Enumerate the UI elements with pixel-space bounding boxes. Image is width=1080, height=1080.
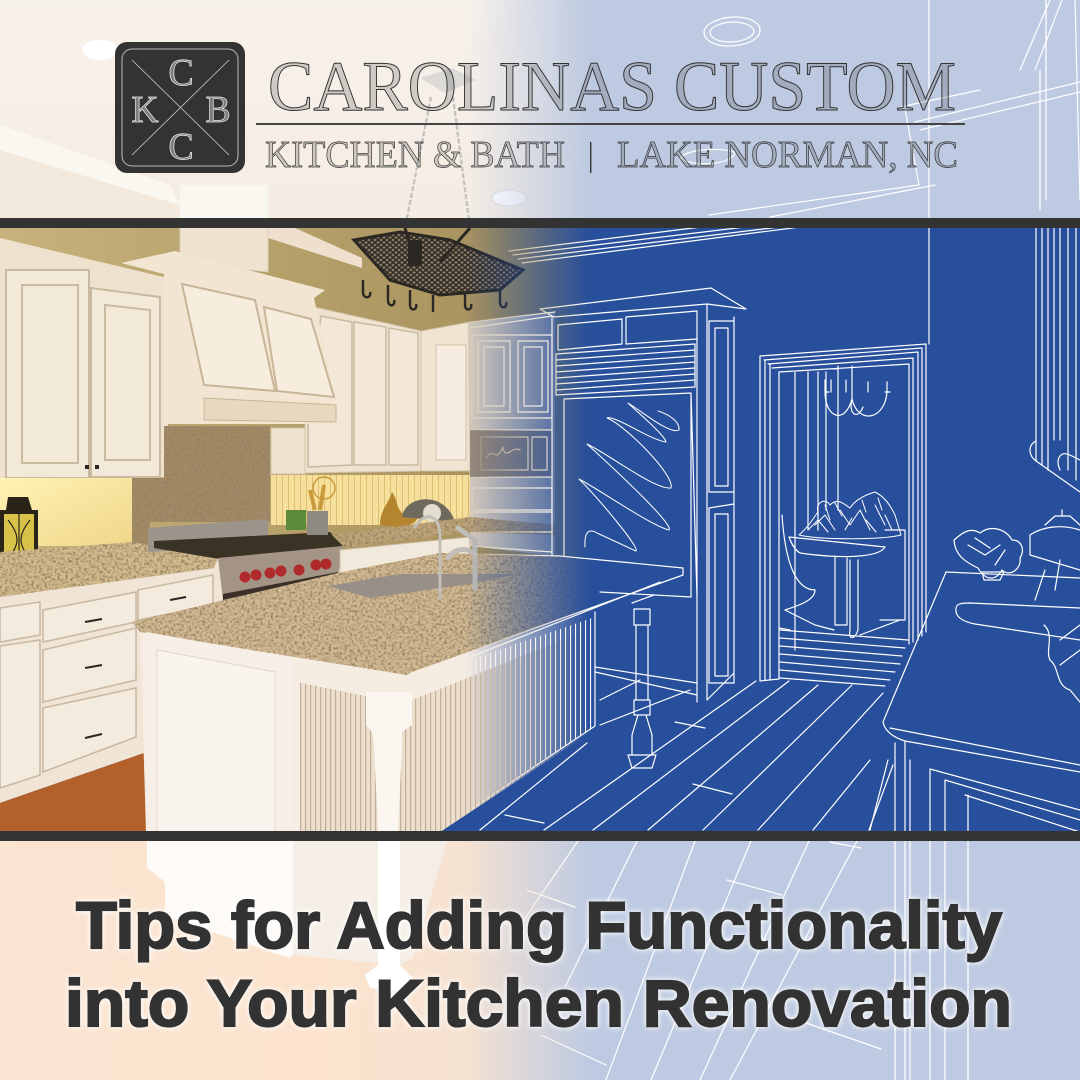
photo: upper wall below crown	[0, 150, 95, 180]
burner grates	[154, 532, 343, 560]
blueprint drawing: white line art of kitchen	[412, 0, 1080, 1080]
photo: rear right counter	[332, 517, 555, 548]
blueprint: tall fridge cabinet	[540, 288, 746, 702]
tagline right: LAKE NORMAN, NC	[617, 134, 958, 176]
drawer pulls	[85, 597, 186, 738]
photo half of the kitchen, fading into the blueprint	[0, 0, 585, 1080]
photo: island apron	[296, 610, 600, 702]
blueprint: top band ceiling lights	[680, 17, 760, 164]
photo: island underlay	[140, 605, 600, 832]
photo: left granite counter	[0, 542, 218, 597]
photo: bottom island reflection	[147, 841, 447, 993]
photo: island countertop	[132, 553, 584, 675]
blueprint: crown molding and wall corner	[509, 0, 1080, 344]
photo: pendant chains and mount	[405, 68, 476, 228]
photo: cream tower cabinet under the blueprint	[468, 312, 555, 556]
tagline left: KITCHEN & BATH	[265, 134, 565, 176]
logo badge KCBC: K	[131, 89, 159, 131]
blueprint: dining table and chairs	[779, 515, 905, 638]
blueprint: upper cabinets, microwave and drawers	[468, 312, 555, 552]
blueprint: chandelier	[825, 366, 890, 416]
blueprint: turned island leg	[628, 595, 656, 768]
blueprint: right plants and teapot	[954, 510, 1080, 702]
photo: island left panel	[146, 632, 219, 645]
pot rack hooks	[363, 280, 506, 312]
photo: faucets	[415, 517, 475, 598]
photo: lit wall under left cabinets	[0, 478, 132, 546]
photo: wood floor	[0, 752, 147, 832]
photo: ceiling light	[492, 190, 526, 206]
photo: counter decor	[286, 477, 455, 535]
photo: sink	[328, 574, 518, 598]
photo: left upper cabinets	[0, 238, 168, 480]
washed-out bottom band overlay	[0, 841, 1080, 1080]
divider rule under company name	[256, 123, 965, 125]
photo: hood chimney	[180, 185, 268, 272]
logo badge KCBC: C	[168, 52, 194, 94]
corner cabinet	[421, 322, 470, 471]
red knobs	[240, 558, 332, 582]
wire dome	[402, 499, 455, 522]
photo: upper right cabinets	[271, 307, 470, 474]
washed-out top band overlay	[0, 0, 1080, 218]
photo: bottom floor	[0, 841, 620, 1080]
glow of recessed ceiling light	[82, 40, 118, 60]
tagline separator	[590, 142, 591, 173]
title line 2: into Your Kitchen Renovation	[65, 966, 1012, 1040]
blueprint: right upper cabinet	[1030, 227, 1080, 492]
company name: CAROLINAS CUSTOM	[268, 48, 956, 126]
photo: range hood	[121, 251, 336, 424]
photo: walls	[0, 228, 620, 558]
blueprint: fridge scribble reflection	[579, 403, 679, 551]
photo: island beadboard	[300, 625, 600, 832]
photo: lower left cabinets	[0, 555, 214, 803]
logo badge KCBC: C	[168, 126, 194, 168]
dark divider bar bottom	[0, 831, 1080, 841]
logo badge KCBC: B	[205, 89, 231, 131]
photo: ceiling	[0, 0, 572, 218]
dark divider bar top	[0, 218, 1080, 228]
blueprint: floor planks	[505, 680, 893, 830]
blueprint: island beadboard lines	[470, 617, 595, 808]
blueprint: doorway and dining room	[760, 344, 926, 681]
title	[65, 888, 1012, 1040]
logo badge KCBC	[115, 42, 245, 173]
photo: range	[148, 519, 343, 600]
photo: lit beadboard wall	[271, 475, 470, 525]
photo: island panel inset	[157, 650, 275, 832]
hood panels	[182, 284, 334, 397]
photo: crown molding	[0, 125, 362, 268]
blueprint: dining plant	[799, 492, 901, 539]
rooster	[380, 492, 418, 527]
photo: underlay behind lower units	[214, 555, 560, 602]
blueprint: dining room floor	[780, 630, 908, 686]
title line 1: Tips for Adding Functionality	[76, 888, 1002, 962]
cabinet doors	[6, 270, 160, 478]
photo: microwave	[470, 430, 552, 477]
cabinet knobs	[85, 465, 99, 469]
photo: lantern	[0, 497, 38, 552]
photo: rear lower cabinets	[340, 537, 470, 572]
blueprint: island outline and base	[412, 553, 683, 830]
oven front	[218, 546, 343, 600]
hood base band	[204, 398, 336, 422]
blueprint: bottom band floor lines	[510, 841, 881, 1080]
photo: pot rack	[354, 228, 523, 312]
cabinet base and drawers	[0, 575, 213, 788]
blueprint: right counter and sink	[870, 572, 1080, 1080]
photo: stone backsplash	[132, 426, 270, 545]
photo: island post	[366, 692, 412, 832]
